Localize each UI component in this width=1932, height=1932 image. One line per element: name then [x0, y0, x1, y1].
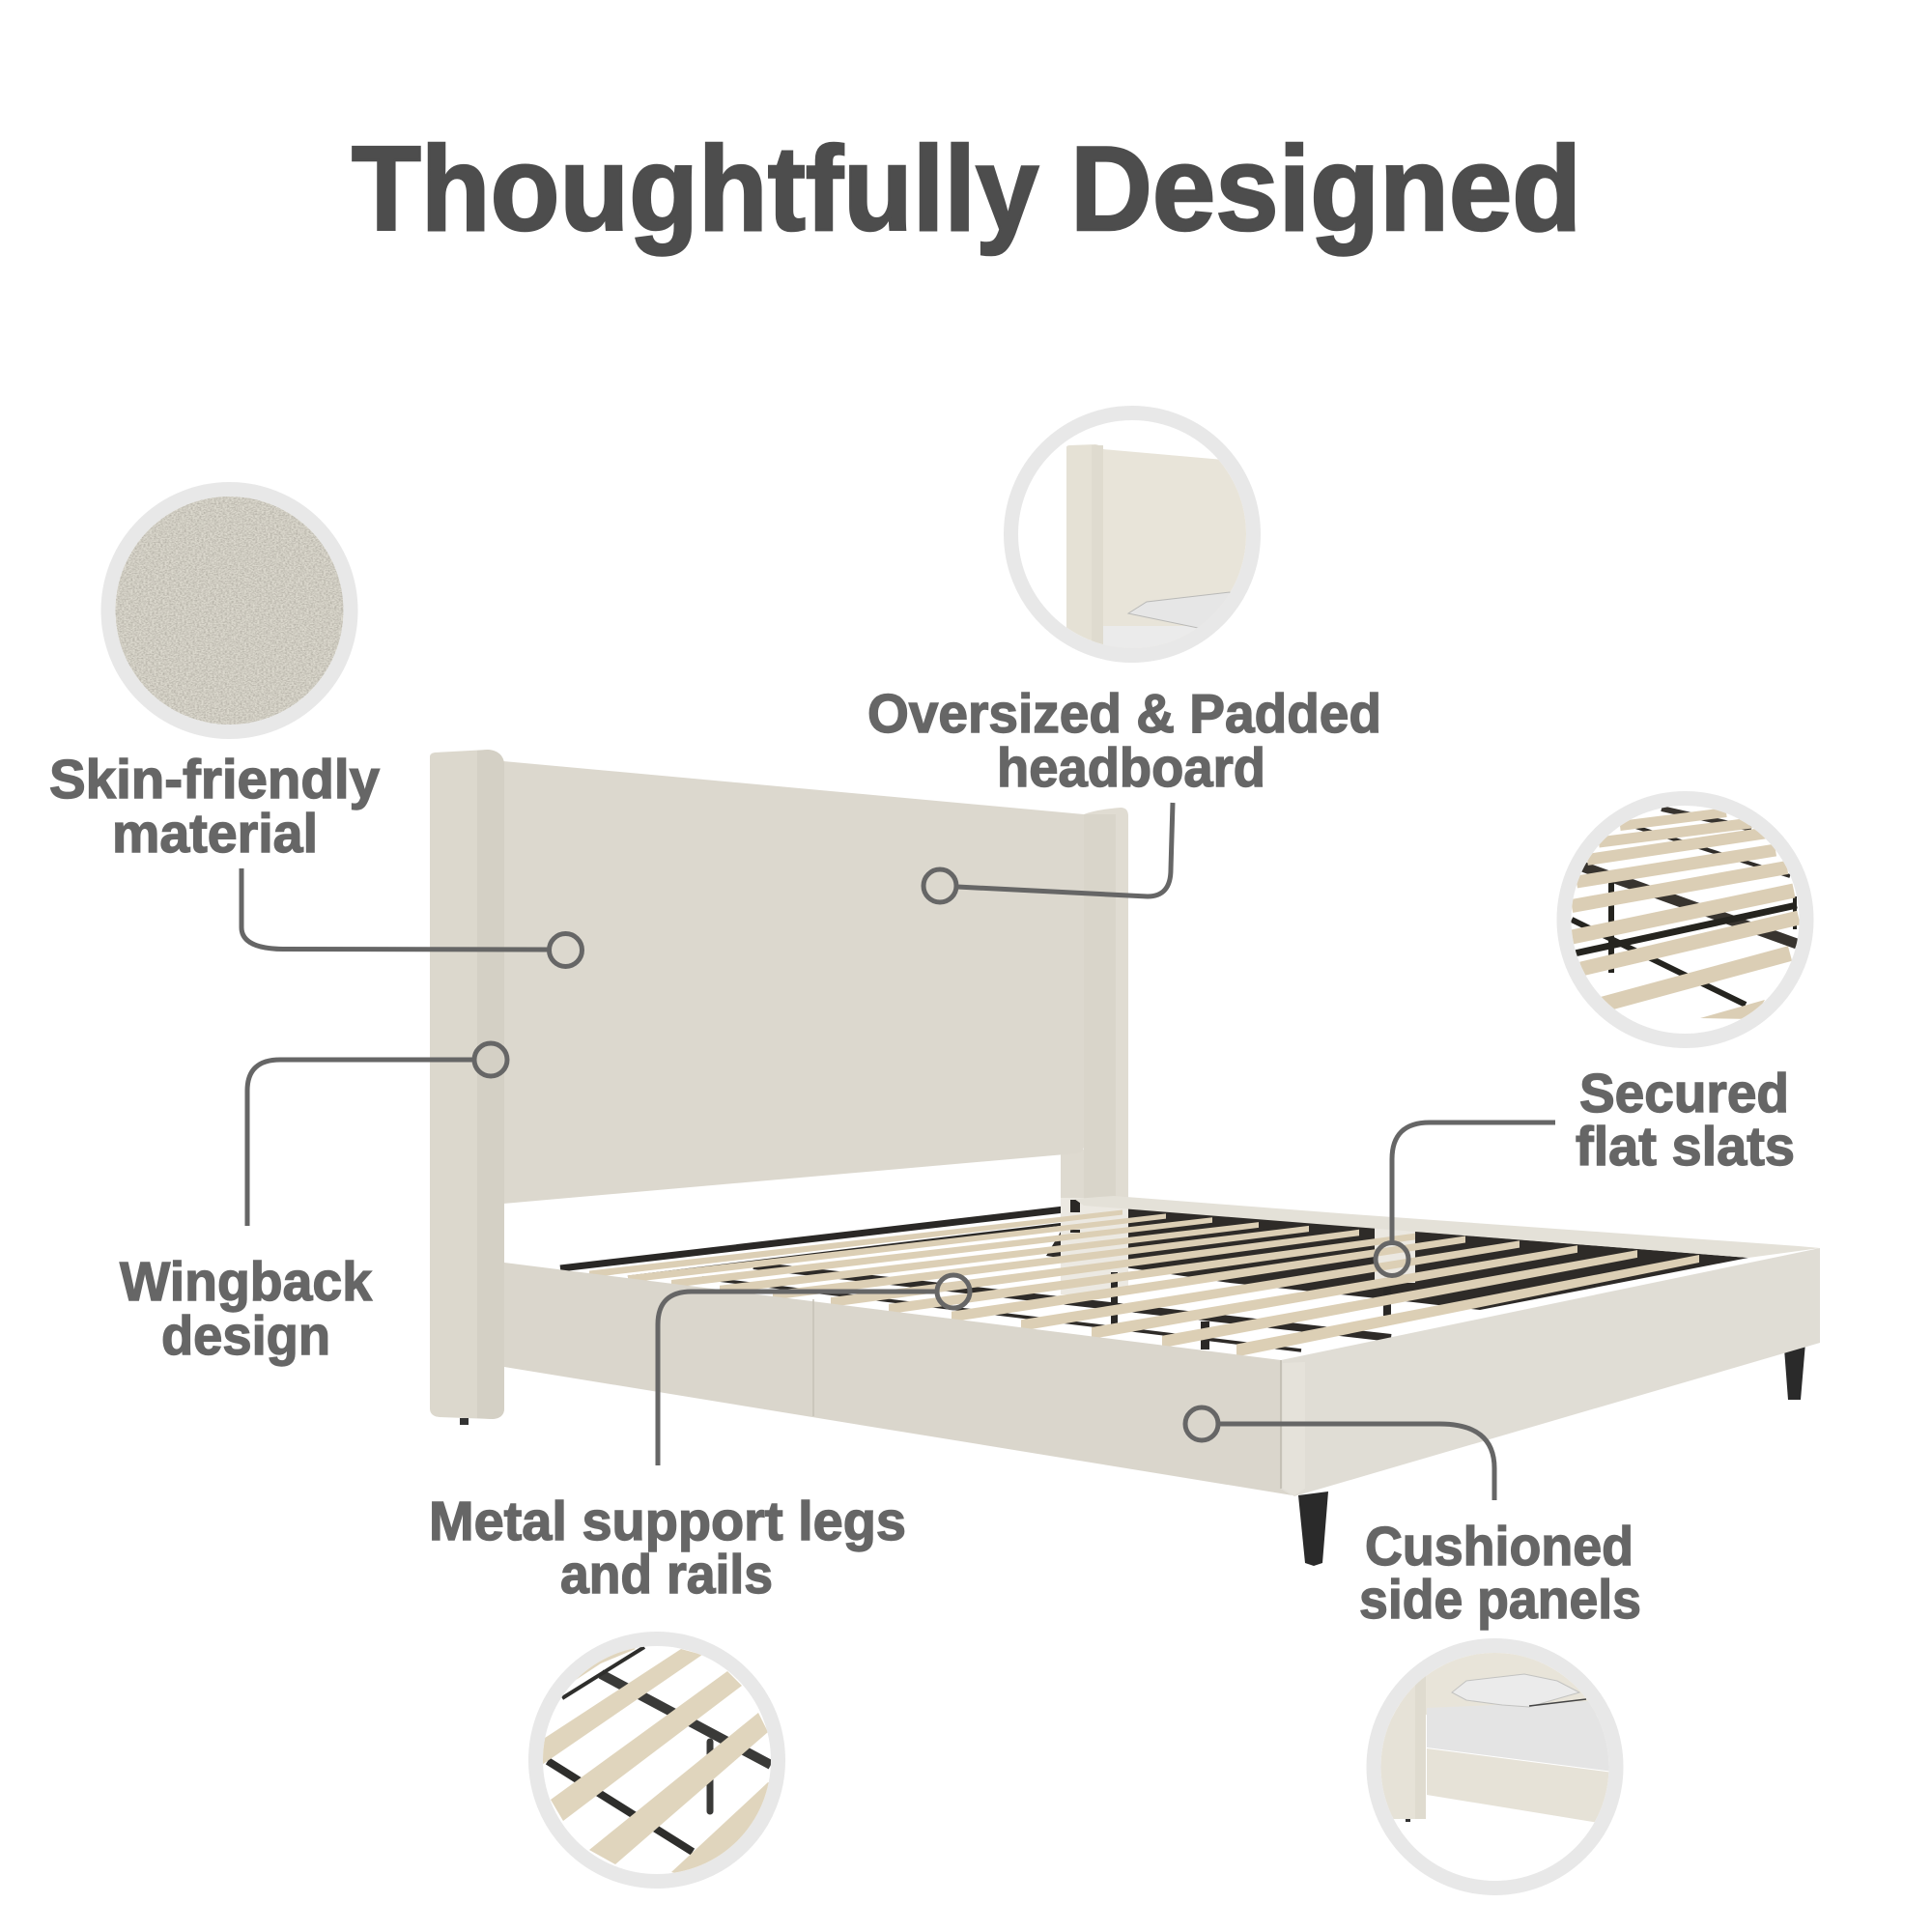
- metal rails and shadow under the slats: [560, 1205, 1748, 1350]
- callout: skin-friendly: [242, 868, 582, 966]
- callout: slats: [1376, 1122, 1555, 1275]
- label: skin-friendly material: [49, 749, 380, 865]
- panel: metal support legs: [535, 1637, 787, 1882]
- label: oversized and padded headboard: Oversized & Padded: [867, 683, 1381, 745]
- slats closeup: [1572, 809, 1799, 1019]
- callout: headboard: [923, 803, 1173, 902]
- fabric swatch: [116, 497, 344, 724]
- label: cushioned side panels: [1359, 1516, 1641, 1631]
- foot end panel: [1281, 1248, 1820, 1496]
- inset ring: [108, 489, 351, 732]
- label: secured flat slats: flat slats: [1576, 1116, 1795, 1178]
- inset ring: [1010, 413, 1254, 655]
- rails and slats closeup: [543, 1646, 771, 1873]
- right headboard wing: [1084, 808, 1128, 1201]
- foot leg right: [1784, 1343, 1805, 1400]
- label: metal support legs and rails: and rails: [560, 1544, 773, 1605]
- label: metal support legs and rails: [429, 1491, 906, 1605]
- support legs seen through the slats: [1070, 1200, 1391, 1350]
- label: oversized and padded headboard: headboard: [997, 737, 1265, 799]
- label: wingback design: design: [161, 1305, 330, 1367]
- callout: metal supports: [658, 1275, 970, 1465]
- label: skin-friendly material: Skin-friendly: [49, 749, 380, 810]
- far side rail: [1074, 1196, 1820, 1258]
- inset ring: [1564, 798, 1806, 1041]
- label: oversized and padded headboard: [867, 683, 1381, 799]
- foot leg left: [1298, 1492, 1328, 1566]
- callout: side panels: [1185, 1407, 1494, 1500]
- label: metal support legs and rails: Metal support legs: [429, 1491, 906, 1552]
- label: wingback design: Wingback: [120, 1251, 372, 1313]
- left headboard wing: [430, 750, 504, 1425]
- panel: oversized headboard: [1010, 413, 1258, 676]
- callout: wingback: [247, 1043, 507, 1226]
- headboard panel: [503, 761, 1084, 1204]
- headboard closeup: [1066, 444, 1246, 648]
- illustration: upholstered bed frame: [430, 750, 1820, 1566]
- label: secured flat slats: [1576, 1063, 1795, 1178]
- inset ring: [535, 1638, 779, 1882]
- title: Thoughtfully Designed: [352, 123, 1581, 256]
- panel: cushioned side panels: [1374, 1642, 1619, 1888]
- label: cushioned side panels: Cushioned: [1365, 1516, 1634, 1577]
- panel: secured flat slats: [1564, 798, 1806, 1041]
- far wing post below headboard: [1061, 1150, 1415, 1294]
- label: wingback design: [120, 1251, 372, 1367]
- label: skin-friendly material: material: [112, 803, 318, 865]
- panel: skin-friendly material: [106, 488, 353, 734]
- label: cushioned side panels: side panels: [1359, 1569, 1641, 1631]
- long front side panel: [504, 1263, 1293, 1495]
- wooden slats: [589, 1209, 1699, 1356]
- label: secured flat slats: Secured: [1579, 1063, 1789, 1124]
- inset ring: [1374, 1646, 1616, 1888]
- side panel closeup: [1381, 1653, 1609, 1822]
